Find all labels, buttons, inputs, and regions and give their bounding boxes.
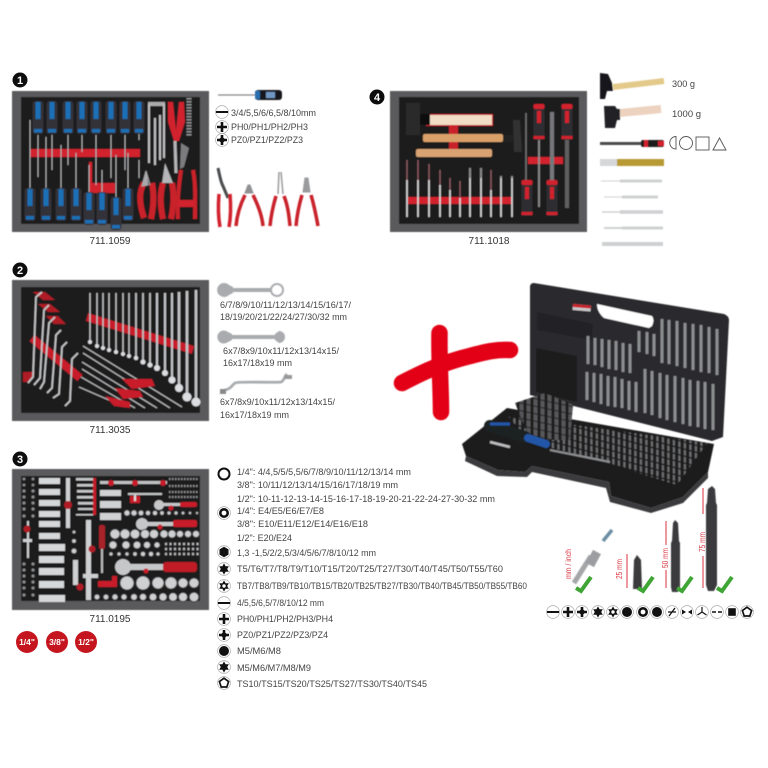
screwdriver handle xyxy=(490,426,525,437)
case lid xyxy=(530,283,729,441)
section 3 number badge xyxy=(12,452,28,466)
tool image: 300 g hammer xyxy=(600,73,664,99)
badge: 3/8 inch: 3/8" xyxy=(49,637,65,647)
screwdriver xyxy=(99,525,105,549)
text: tray code 711.1018: 711.1018 xyxy=(469,236,510,247)
text: offset spanner sizes: 16x17/18x19 mm xyxy=(220,410,289,420)
detail: 25 mm bit xyxy=(615,554,642,589)
text: combination spanner sizes: 6/7/8/9/10/11/12/13/14/15/16/17/ xyxy=(220,300,351,310)
text: offset spanner sizes xyxy=(220,397,336,420)
row text: 1/2": 10-11-12-13-14-15-16-17-18-19-20-21-22-24-27-30-32 mm xyxy=(237,494,495,504)
text: combination spanner sizes xyxy=(220,300,351,322)
wrench image: open-end spanner xyxy=(217,330,285,344)
row text: 1/2": E20/E24 xyxy=(237,533,292,543)
row text: TB7/TB8/TB9/TB10/TB15/TB20/TB25/TB27/TB30/TB40/TB45/TB50/TB55/TB60 xyxy=(237,581,527,591)
green check marks xyxy=(576,577,732,591)
list: screwdriver sizes xyxy=(216,106,316,146)
row text: PZ0/PZ1/PZ2/PZ3/PZ4 xyxy=(237,630,328,640)
wrench image: offset ring spanner xyxy=(220,374,292,394)
small bits grid xyxy=(508,416,707,485)
row text: M5/M6/M7/M8/M9 xyxy=(237,663,311,673)
list: screwdriver sizes: PH0/PH1/PH2/PH3 xyxy=(231,122,308,132)
section 1 number badge xyxy=(12,72,28,88)
row text: 1,3 -1,5/2/2,5/3/4/5/6/7/8/10/12 mm xyxy=(237,548,376,558)
socket rows xyxy=(71,510,200,602)
section 2 number badge: 2 xyxy=(17,265,23,277)
text: combination spanner sizes: 18/19/20/21/22/24/27/30/32 mm xyxy=(220,312,347,322)
row text: 3/8": 10/11/12/13/14/15/16/17/18/19 mm xyxy=(237,480,398,490)
wrench image: combination spanner xyxy=(217,283,283,297)
row text: TS10/TS15/TS20/TS25/TS27/TS30/TS40/TS45 xyxy=(237,679,427,689)
extension bars xyxy=(23,478,98,600)
badge: 1/2 inch xyxy=(75,631,97,653)
text: open-end spanner sizes xyxy=(223,346,340,368)
text: offset spanner sizes: 6x7/8x9/10x11/12x13/14x15/ xyxy=(220,397,336,407)
row text: M5/M6/M8 xyxy=(237,646,281,656)
ratchets xyxy=(154,500,164,510)
tool image: 1000 g hammer xyxy=(604,106,661,128)
text: tray code 711.3035: 711.3035 xyxy=(90,425,131,436)
row text: 1/4": 4/4,5/5/5,5/6/7/8/9/10/11/12/13/14 mm xyxy=(237,467,411,477)
panel: tray 711.1018 hammers, files and punches xyxy=(390,91,587,232)
row text: 4/5,5/6,5/7/8/10/12 mm xyxy=(237,598,324,608)
row text: 3/8": E10/E11/E12/E14/E16/E18 xyxy=(237,519,368,529)
badge: 3/8 inch xyxy=(46,631,68,653)
section 1 number badge: 1 xyxy=(17,75,23,87)
bits in lid xyxy=(587,319,717,430)
text: open-end spanner sizes: 16x17/18x19 mm xyxy=(223,358,292,368)
product: bit set case xyxy=(462,283,729,513)
detail: 75 mm bit: 75 mm xyxy=(698,532,707,552)
detail: 50 mm bit: 50 mm xyxy=(661,548,670,568)
badge: 1/2 inch: 1/2" xyxy=(78,637,94,647)
detail: 75 mm bit xyxy=(698,486,717,591)
text: 300 g: 300 g xyxy=(672,79,695,89)
row text: 1/4": E4/E5/E6/E7/E8 xyxy=(237,506,324,516)
tool image: pliers xyxy=(218,168,318,227)
icons: file cross sections xyxy=(670,136,726,150)
list: screwdriver sizes: PZ0/PZ1/PZ2/PZ3 xyxy=(231,135,303,145)
red plus sign xyxy=(402,333,510,412)
tool image: file with red handle xyxy=(600,140,664,147)
section 2 number badge xyxy=(12,262,28,278)
badge: 1/4 inch: 1/4" xyxy=(19,637,35,647)
case base xyxy=(462,408,714,508)
detail: nut driver and screw xyxy=(574,530,612,583)
tool image: chisel xyxy=(600,159,664,166)
section 4 number badge xyxy=(370,90,384,104)
text: 1000 g: 1000 g xyxy=(672,109,701,119)
row text xyxy=(237,467,527,689)
detail: mm / inch label: mm / inch xyxy=(564,549,573,579)
text: tray code 711.1059: 711.1059 xyxy=(90,236,131,247)
list: socket and bit sizes xyxy=(218,467,527,689)
list: screwdriver sizes: 3/4/5,5/6/6,5/8/10mm xyxy=(231,108,316,118)
detail: 50 mm bit xyxy=(661,520,680,592)
bit holders xyxy=(93,478,96,515)
detail: 25 mm bit: 25 mm xyxy=(615,559,624,579)
badge: 1/4 inch xyxy=(16,631,38,653)
tool image: screwdriver xyxy=(218,90,282,100)
section 4 number badge: 4 xyxy=(374,92,381,104)
panel: tray 711.1059 screwdrivers and pliers xyxy=(12,91,209,232)
tool images: punches xyxy=(601,181,663,244)
section 3 number badge: 3 xyxy=(17,454,23,466)
panel: tray 711.0195 sockets and ratchets xyxy=(12,469,209,610)
long sockets xyxy=(39,478,65,602)
small sockets left columns xyxy=(22,478,34,596)
row icons xyxy=(218,468,230,689)
panel: tray 711.3035 wrenches xyxy=(12,280,209,421)
icon row: bit profiles xyxy=(547,606,753,618)
row text: T5/T6/T7/T8/T9/T10/T15/T20/T25/T27/T30/T40/T45/T50/T55/T60 xyxy=(237,564,503,574)
row text: PH0/PH1/PH2/PH3/PH4 xyxy=(237,614,333,624)
text: tray code 711.0195: 711.0195 xyxy=(90,614,131,625)
text: open-end spanner sizes: 6x7/8x9/10x11/12x13/14x15/ xyxy=(223,346,340,356)
